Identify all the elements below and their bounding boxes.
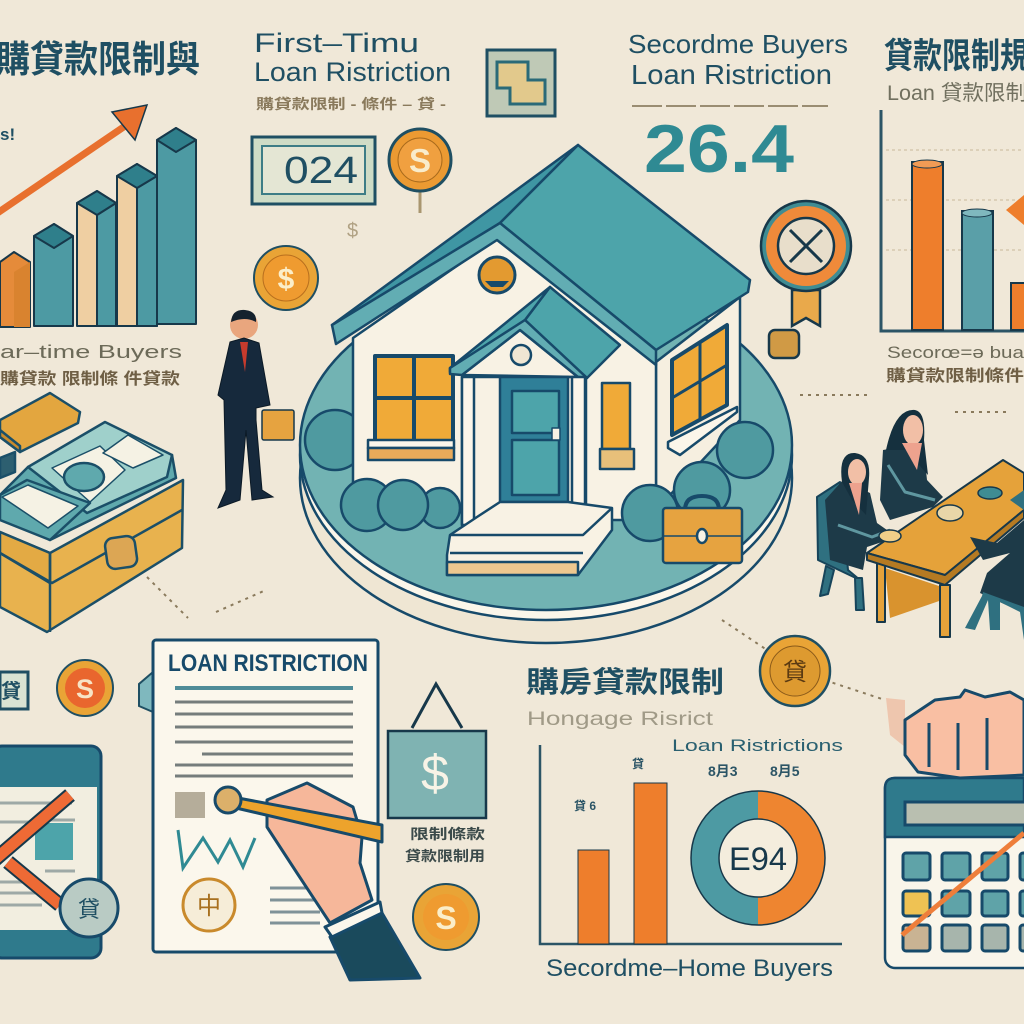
- hanging price tag with dollar: $: [421, 745, 449, 801]
- small dollar mark: $: [347, 220, 358, 242]
- heading: first-time loan restriction: 購貸款限制 - 條件 – 貸 -: [256, 96, 446, 112]
- house right wall: [656, 297, 740, 510]
- label: second home buyers top right: Secorœ=ə bua: [887, 343, 1024, 362]
- house front wall: [353, 238, 656, 520]
- left window: [368, 356, 454, 460]
- heading: first-time loan restriction: First–Timu: [254, 28, 419, 58]
- heading: mortgage restriction: [526, 666, 724, 730]
- heading: mortgage restriction: Hongage Risrict: [527, 709, 714, 730]
- hand on calculator: [886, 690, 1024, 778]
- caption beside document: 限制條款: [410, 826, 485, 842]
- coin: dollar left: [254, 246, 318, 310]
- bar and donut chart: 8月3: [708, 763, 738, 779]
- heading: second home buyers: Loan Ristriction: [631, 59, 832, 90]
- document: loan restriction: [139, 640, 378, 952]
- side window by door: [600, 383, 634, 469]
- coin: bottom: S: [435, 900, 457, 936]
- left chair: [817, 482, 864, 610]
- bar and donut chart: 8月5: [770, 763, 800, 779]
- coin: bottom: [413, 884, 479, 950]
- cash bundles: [0, 422, 176, 540]
- steps: [447, 502, 612, 575]
- banknote 024: 024: [284, 150, 358, 192]
- bar and donut chart: Loan Ristrictions: [672, 736, 843, 755]
- small coin on document: [183, 879, 235, 931]
- coin: dollar top: [389, 129, 451, 213]
- icon: small tag left: [0, 672, 28, 709]
- porch columns: [462, 377, 585, 525]
- bar and donut chart: 貸 6: [574, 798, 596, 813]
- bar chart with rising arrow: [0, 128, 196, 327]
- donut: E94: [729, 841, 787, 877]
- hand writing with pencil: [215, 783, 420, 980]
- donut: [691, 791, 825, 925]
- wallet: [0, 393, 80, 478]
- caption beside document: 貸款限制用: [405, 848, 485, 864]
- label: first-time buyers left: 購貸款 限制條 件貸款: [0, 369, 180, 388]
- central house on platform: [300, 145, 792, 643]
- label: first-time buyers left: [0, 342, 182, 388]
- clipboard with red cross: 貸: [78, 897, 100, 922]
- door: [500, 377, 568, 502]
- bar chart: top right: [881, 110, 1024, 331]
- exclamation note: s!: [0, 125, 15, 144]
- stack of cash in box: [0, 393, 183, 632]
- coin: top of bottom chart: [760, 636, 830, 706]
- hanging price tag with dollar: [388, 684, 486, 818]
- box: [0, 480, 183, 632]
- subheading: top right: Loan 貸款限制: [887, 82, 1024, 105]
- icon: small floor plan: [487, 50, 555, 116]
- briefcase right of house: [663, 496, 742, 563]
- heading: mortgage restriction: 購房貸款限制: [526, 666, 724, 699]
- bar and donut chart: [540, 736, 843, 944]
- bar and donut chart: 貸: [632, 756, 644, 771]
- back bushes: [305, 410, 365, 470]
- icon: small tag left: 貸: [1, 679, 21, 703]
- heading: second home buyers: [628, 29, 848, 106]
- banknote 024: [252, 137, 375, 204]
- arrow: rising trend: [0, 105, 147, 214]
- caption beside document: [405, 826, 485, 864]
- dotted connectors: [147, 395, 1010, 700]
- person right: [965, 490, 1024, 640]
- main roof: [332, 145, 750, 365]
- front bushes: [341, 422, 773, 541]
- label: second home buyers top right: 購貸款限制條件: [886, 366, 1024, 385]
- label: second home buyers bottom: Secordme–Home Buyers: [546, 955, 833, 982]
- meeting at a table: [817, 410, 1024, 640]
- big number: 26.4: [644, 111, 794, 187]
- clipboard with red cross: [0, 746, 118, 958]
- heading: first-time loan restriction: Loan Ristriction: [254, 57, 451, 87]
- title: top left heading: 購貸款限制與: [0, 39, 200, 80]
- porch: [450, 287, 620, 525]
- no symbol sign: [761, 201, 851, 358]
- small coin on document: 中: [197, 893, 221, 920]
- label: first-time buyers left: ar–time Buyers: [0, 342, 182, 362]
- coin: dollar left: $: [278, 263, 295, 296]
- coin: top of bottom chart: 貸: [783, 659, 807, 686]
- calculator: [885, 778, 1024, 968]
- businessman with briefcase: [218, 310, 294, 508]
- coin: orange: [57, 660, 113, 716]
- label: second home buyers top right: [886, 343, 1024, 385]
- platform: [300, 280, 792, 643]
- table: [867, 460, 1024, 637]
- coin: dollar top: S: [409, 142, 431, 179]
- woman right: [880, 410, 943, 520]
- woman left: [825, 453, 897, 570]
- roof badge: [479, 257, 515, 293]
- document heading: LOAN RISTRICTION: [168, 650, 368, 677]
- right window: [668, 325, 737, 455]
- heading: first-time loan restriction: [254, 28, 451, 112]
- coin: orange: S: [76, 674, 94, 704]
- heading: second home buyers: Secordme Buyers: [628, 29, 848, 59]
